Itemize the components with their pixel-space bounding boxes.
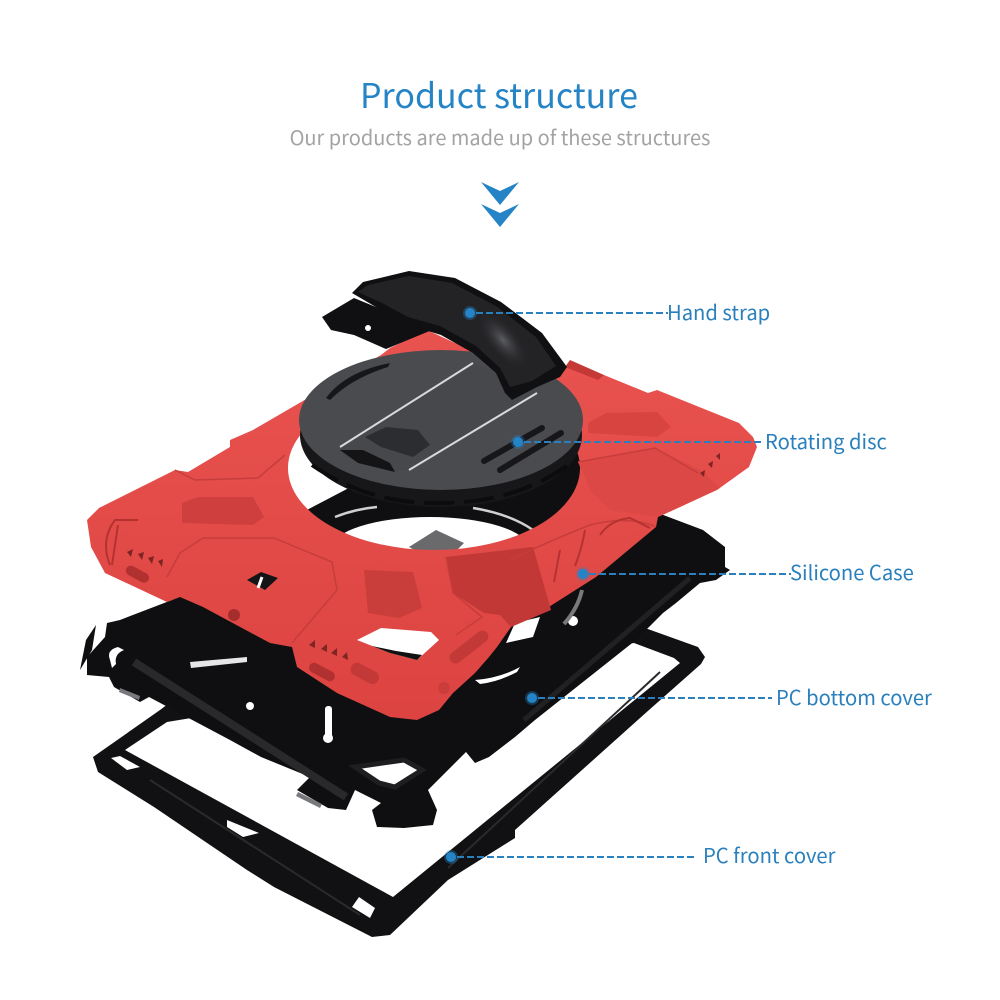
- label: PC bottom cover: [525, 682, 932, 711]
- title: Product structure: [360, 69, 638, 118]
- label: PC front cover: [444, 840, 836, 869]
- Silicone case: [87, 330, 757, 720]
- text: Silicone Case: [790, 557, 914, 586]
- leader line: [463, 306, 668, 320]
- PC bottom cover: [80, 440, 730, 828]
- Hand strap: [322, 271, 567, 400]
- text: PC bottom cover: [776, 682, 932, 711]
- text: Hand strap: [667, 297, 770, 326]
- leader line: [525, 691, 772, 705]
- text: PC front cover: [703, 840, 835, 869]
- leader line: [511, 435, 761, 449]
- label: Hand strap: [463, 297, 770, 326]
- PC front cover: [93, 628, 705, 937]
- leader line: [444, 850, 694, 864]
- subtitle: Our products are made up of these structures: [290, 122, 710, 151]
- hand strap slot: [340, 363, 537, 472]
- label: Rotating disc: [511, 426, 887, 455]
- Rotating disc: [299, 350, 583, 507]
- label: Silicone Case: [576, 557, 914, 586]
- icon: double down arrow: [481, 182, 519, 227]
- text: Rotating disc: [765, 426, 887, 455]
- leader line: [576, 567, 791, 581]
